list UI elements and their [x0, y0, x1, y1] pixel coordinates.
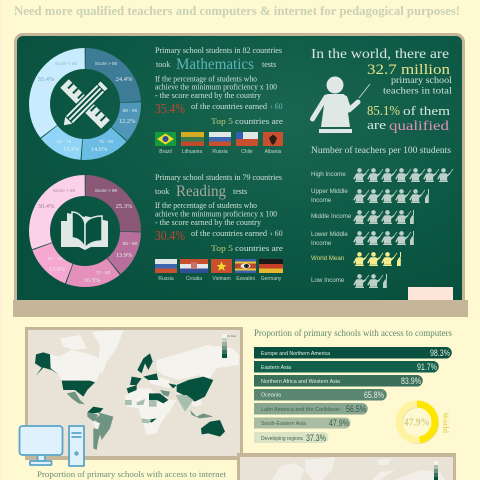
- text block: mathematics: [155, 46, 284, 126]
- text block: world teachers: [311, 46, 453, 134]
- flags: reading top 5: Russia: [158, 276, 174, 282]
- text block: world teachers: 85.1%: [367, 104, 400, 119]
- pictogram: lower middle income: Income: [311, 240, 332, 247]
- pictogram: world mean: [311, 252, 401, 266]
- flags: mathematics top 5: Brazil: [159, 149, 172, 155]
- reading donut labels: 30.4%: [38, 203, 55, 210]
- mathematics donut labels: 80 - 90: [123, 108, 138, 113]
- world map: [35, 330, 239, 450]
- reading donut labels: 16.5%: [84, 277, 101, 284]
- flag: Croatia: [180, 259, 208, 273]
- pictogram: lower middle income: Lower Middle: [311, 231, 348, 238]
- bar: Oceania: [254, 389, 387, 400]
- reading donut labels: 13.9%: [49, 266, 66, 273]
- flags: reading top 5: Germany: [261, 276, 282, 282]
- flag: Vietnam: [211, 259, 232, 273]
- map frame: [25, 327, 243, 460]
- text block: reading: 30.4%: [155, 229, 185, 244]
- text block: reading: tests: [233, 187, 247, 196]
- panel: internet access map: [25, 327, 243, 460]
- mathematics donut labels: 14.6%: [91, 146, 108, 153]
- mathematics donut labels: 70 - 80: [99, 139, 114, 144]
- text block: reading: took: [155, 187, 169, 196]
- text block: world teachers: primary school: [391, 75, 453, 85]
- bar: Eastern Asia: [254, 361, 439, 372]
- flag: Albania: [263, 132, 283, 146]
- text block: world teachers: teachers in total: [383, 86, 453, 96]
- flags: reading top 5: Vietnam: [212, 276, 231, 282]
- icon: desktop computer: [20, 426, 84, 466]
- chart: world donut: [399, 404, 451, 441]
- pictogram: upper middle income: Income: [311, 197, 332, 204]
- bar: Northern Africa and Western Asia: [254, 375, 423, 386]
- text block: mathematics: tests: [262, 60, 276, 69]
- panel: second map: [237, 453, 456, 480]
- text block: mathematics: took: [156, 60, 170, 69]
- text block: mathematics: ‹ 60: [270, 102, 283, 111]
- second map land: [272, 457, 445, 480]
- pictogram: upper middle income: [311, 188, 429, 204]
- mathematics donut labels: 24.4%: [116, 76, 133, 83]
- flags: mathematics top 5: Chile: [241, 149, 253, 155]
- pictogram: lower middle income: [311, 231, 414, 247]
- reading donut labels: Score > 90: [95, 188, 118, 193]
- reading donut labels: 13.9%: [116, 252, 133, 259]
- panel: chalkboard: [13, 33, 468, 317]
- chart: world donut: 47.9%: [404, 418, 430, 428]
- chart: world donut: World: [441, 412, 451, 433]
- text block: reading: [155, 173, 284, 253]
- reading donut labels: 70 - 80: [96, 270, 111, 275]
- pictogram: high income: [311, 168, 453, 182]
- bar: Latin America and the Caribbean: Latin America and the Caribbean: [261, 407, 340, 413]
- flag: Russia: [209, 132, 231, 146]
- reading donut labels: [38, 188, 138, 284]
- text block: reading: - the score earned by the country: [155, 218, 261, 227]
- bar: Eastern Asia: 91.7%: [417, 362, 437, 372]
- text block: world teachers: of them: [403, 103, 450, 118]
- bar: Oceania: 65.8%: [364, 390, 384, 400]
- chart: reading donut: [40, 186, 130, 276]
- bar: Europe and Northern America: [254, 347, 452, 358]
- text block: reading: of the countries earned: [191, 229, 267, 238]
- text block: world teachers: 32.7 million: [367, 62, 451, 78]
- text block: world teachers: In the world, there are: [311, 46, 449, 61]
- mathematics donut labels: 12.2%: [119, 118, 136, 125]
- flags: mathematics top 5: Russia: [212, 149, 228, 155]
- bar: Developing regions: [254, 432, 329, 443]
- map legend: [222, 334, 237, 358]
- bar: South-Eastern Asia: South-Eastern Asia: [261, 421, 306, 427]
- text block: world teachers: qualified: [389, 119, 449, 134]
- second map frame: [237, 453, 456, 480]
- pictogram: low income: [311, 274, 387, 288]
- pictogram: high income: High Income: [311, 171, 346, 178]
- bar: Eastern Asia: Eastern Asia: [261, 365, 291, 371]
- text block: reading: ‹ 60: [270, 229, 283, 238]
- icon: teacher with pointer: [312, 76, 370, 133]
- heading: Proportion of primary schools with access to computers: [254, 328, 452, 339]
- mathematics donut labels: [38, 61, 138, 153]
- pictogram: world mean: World Mean: [311, 255, 345, 262]
- text block: reading: If the percentage of students who: [155, 201, 257, 210]
- second map ocean: [240, 457, 453, 480]
- bar: Developing regions: 37.3%: [306, 433, 326, 443]
- chalkboard frame: [14, 33, 465, 301]
- mathematics donut labels: 60 - 70: [57, 139, 72, 144]
- chalkboard surface: [17, 36, 462, 300]
- bar: Europe and Northern America: 98.3%: [430, 348, 450, 358]
- reading donut labels: 80 - 90: [123, 241, 138, 246]
- flags: reading top 5: Croatia: [186, 276, 202, 282]
- bar: Oceania: Oceania: [261, 392, 281, 398]
- eraser: [408, 287, 453, 300]
- reading donut labels: Score < 60: [53, 188, 76, 193]
- flag: Russia: [155, 259, 177, 273]
- second map legend: [434, 461, 438, 480]
- bar: South-Eastern Asia: [254, 418, 351, 429]
- bar: Northern Africa and Western Asia: 83.9%: [401, 376, 421, 386]
- text block: reading: achieve the minimum proficiency x 100: [155, 210, 277, 218]
- text block: mathematics: Mathematics: [176, 56, 254, 73]
- text block: reading: Top 5: [211, 243, 233, 253]
- pictogram: middle income: Middle Income: [311, 213, 352, 220]
- pencil: [59, 80, 109, 130]
- bar: Latin America and the Caribbean: [254, 403, 368, 414]
- text block: mathematics: - the score earned by the country: [155, 91, 261, 100]
- caption: internet access: Proportion of primary schools with access to internet: [37, 469, 227, 479]
- flags: mathematics top 5: Lithuania: [182, 149, 202, 155]
- mathematics donut labels: Score > 90: [95, 61, 118, 66]
- reading donut labels: 60 - 70: [48, 256, 63, 261]
- ruler: [60, 79, 110, 129]
- icon: open book: [61, 212, 108, 250]
- pictogram: low income: Low Income: [311, 277, 345, 284]
- chalk ledge: [13, 300, 468, 317]
- mathematics donut labels: Score < 60: [55, 61, 78, 66]
- flag: Brazil: [155, 132, 176, 146]
- text block: mathematics: of the countries earned: [191, 102, 267, 111]
- flags: mathematics top 5: Albania: [265, 149, 282, 155]
- mathematics donut labels: 35.4%: [38, 76, 55, 83]
- reading donut labels: 25.3%: [116, 203, 133, 210]
- text block: reading: Reading: [176, 183, 226, 200]
- text block: reading: countries are: [235, 244, 284, 253]
- flags: reading top 5: [155, 259, 283, 282]
- text block: mathematics: If the percentage of students who: [155, 74, 257, 84]
- title: Need more qualified teachers and computers & internet for pedagogical purposes!: [14, 3, 460, 18]
- text block: reading: Primary school students in 79 countries: [155, 173, 282, 182]
- text block: mathematics: achieve the minimum proficiency x 100: [155, 82, 277, 92]
- chart: mathematics donut: [40, 58, 130, 150]
- mathematics donut labels: 13.4%: [63, 146, 80, 153]
- text block: mathematics: Primary school students in 82 countries: [155, 46, 282, 55]
- flag: Germany: [259, 259, 283, 273]
- text block: world teachers: are: [367, 117, 386, 132]
- text block: mathematics: Top 5: [211, 116, 233, 126]
- panel: computer access bars: [254, 328, 452, 443]
- map legend: No Data: [227, 335, 237, 338]
- bar: South-Eastern Asia: 47.9%: [329, 418, 349, 428]
- text block: mathematics: 35.4%: [155, 102, 185, 117]
- flags: mathematics top 5: [155, 132, 283, 155]
- bar: Europe and Northern America: Europe and Northern America: [261, 351, 330, 357]
- bar: Northern Africa and Western Asia: Northern Africa and Western Asia: [261, 379, 340, 385]
- bar: Latin America and the Caribbean: 56.5%: [346, 404, 366, 414]
- bar: Developing regions: Developing regions: [261, 436, 303, 442]
- flags: reading top 5: Eswatini: [236, 276, 255, 282]
- pictogram: middle income: [311, 210, 414, 224]
- icon: ruler and pencil: [59, 79, 110, 130]
- pictogram: upper middle income: Upper Middle: [311, 188, 348, 195]
- map ocean: [28, 330, 240, 456]
- flag: Chile: [236, 132, 258, 146]
- text block: mathematics: countries are: [235, 117, 284, 126]
- heading: teachers per 100 students: Number of teachers per 100 students: [311, 145, 452, 155]
- flag: Lithuania: [181, 132, 204, 146]
- flag: Eswatini: [235, 259, 256, 273]
